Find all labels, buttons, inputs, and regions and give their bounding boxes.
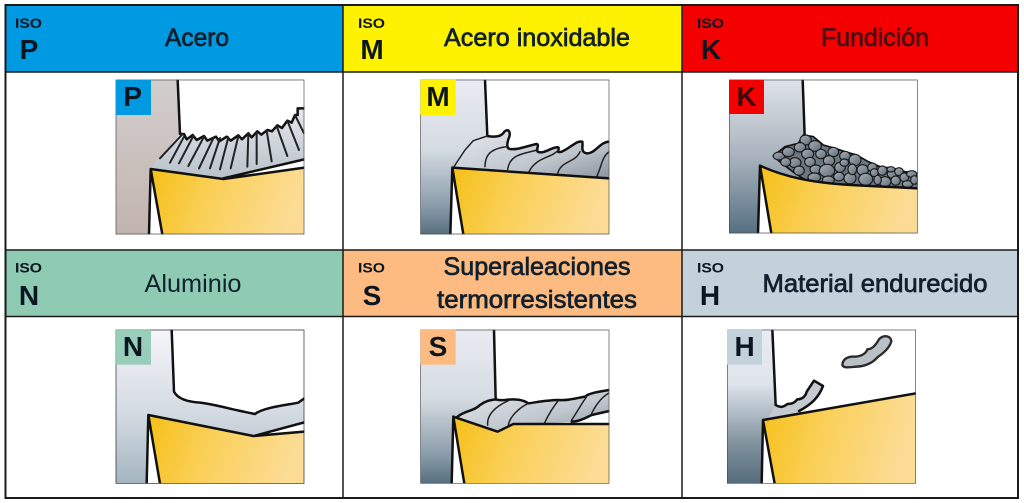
header: ISO H: ISO [697, 260, 724, 276]
header: ISO N: Aluminio [144, 270, 242, 298]
header: ISO N: ISO [15, 260, 42, 276]
header: ISO S: Superaleaciones [444, 253, 630, 281]
cell: ISO K Fundicion [682, 5, 1018, 233]
header: ISO P: Acero [165, 24, 229, 52]
cell: ISO S Superaleaciones [343, 250, 682, 484]
badge: N: N [123, 331, 143, 362]
header: ISO K: Fundición [821, 24, 929, 52]
header: ISO N: N [19, 280, 39, 311]
header: ISO K: K [701, 34, 721, 65]
header: ISO H [682, 250, 1018, 316]
badge: K: K [737, 81, 757, 112]
cell: ISO N Aluminio [5, 250, 343, 484]
diagram: heat resistant alloy chip formation [420, 330, 609, 484]
header: ISO S [343, 250, 682, 316]
flying chip fragment [842, 336, 891, 367]
diagram: hardened material chip formation [727, 330, 916, 484]
diagram: steel chip formation [116, 80, 304, 234]
header: ISO M: M [360, 34, 384, 65]
header: ISO H: Material endurecido [762, 270, 988, 298]
badge: N [116, 330, 151, 365]
pebble chips [773, 135, 918, 188]
header: ISO S: ISO [358, 260, 385, 276]
badge: P: P [123, 81, 142, 112]
badge: S: S [429, 331, 447, 362]
header: ISO M [343, 5, 682, 72]
badge: S [420, 330, 456, 365]
cell: ISO P Acero [5, 5, 343, 234]
cell: ISO H Material endurecido [682, 250, 1018, 484]
badge: M: M [426, 81, 450, 112]
diagram: aluminium chip formation [116, 330, 304, 484]
badge: K [729, 80, 764, 114]
header: ISO H: H [700, 280, 720, 311]
header: ISO S: termorresistentes [437, 286, 637, 314]
header: ISO N [5, 250, 343, 316]
chip fragment near edge [768, 382, 822, 418]
header: ISO K: ISO [697, 15, 724, 31]
diagram: stainless steel chip formation [420, 80, 609, 234]
header: ISO S: S [363, 280, 381, 311]
header: ISO M: ISO [358, 15, 385, 31]
badge: H [727, 330, 762, 365]
badge: M [420, 80, 456, 115]
header: ISO P [5, 5, 343, 72]
header: ISO P: ISO [15, 15, 42, 31]
header: ISO P: P [20, 34, 38, 65]
badge: P [116, 80, 151, 115]
header: ISO K [682, 5, 1018, 72]
badge: H: H [735, 331, 755, 362]
cell: ISO M Acero inoxidable [343, 5, 682, 234]
header: ISO M: Acero inoxidable [444, 24, 630, 52]
diagram: cast iron chip formation [729, 80, 918, 233]
